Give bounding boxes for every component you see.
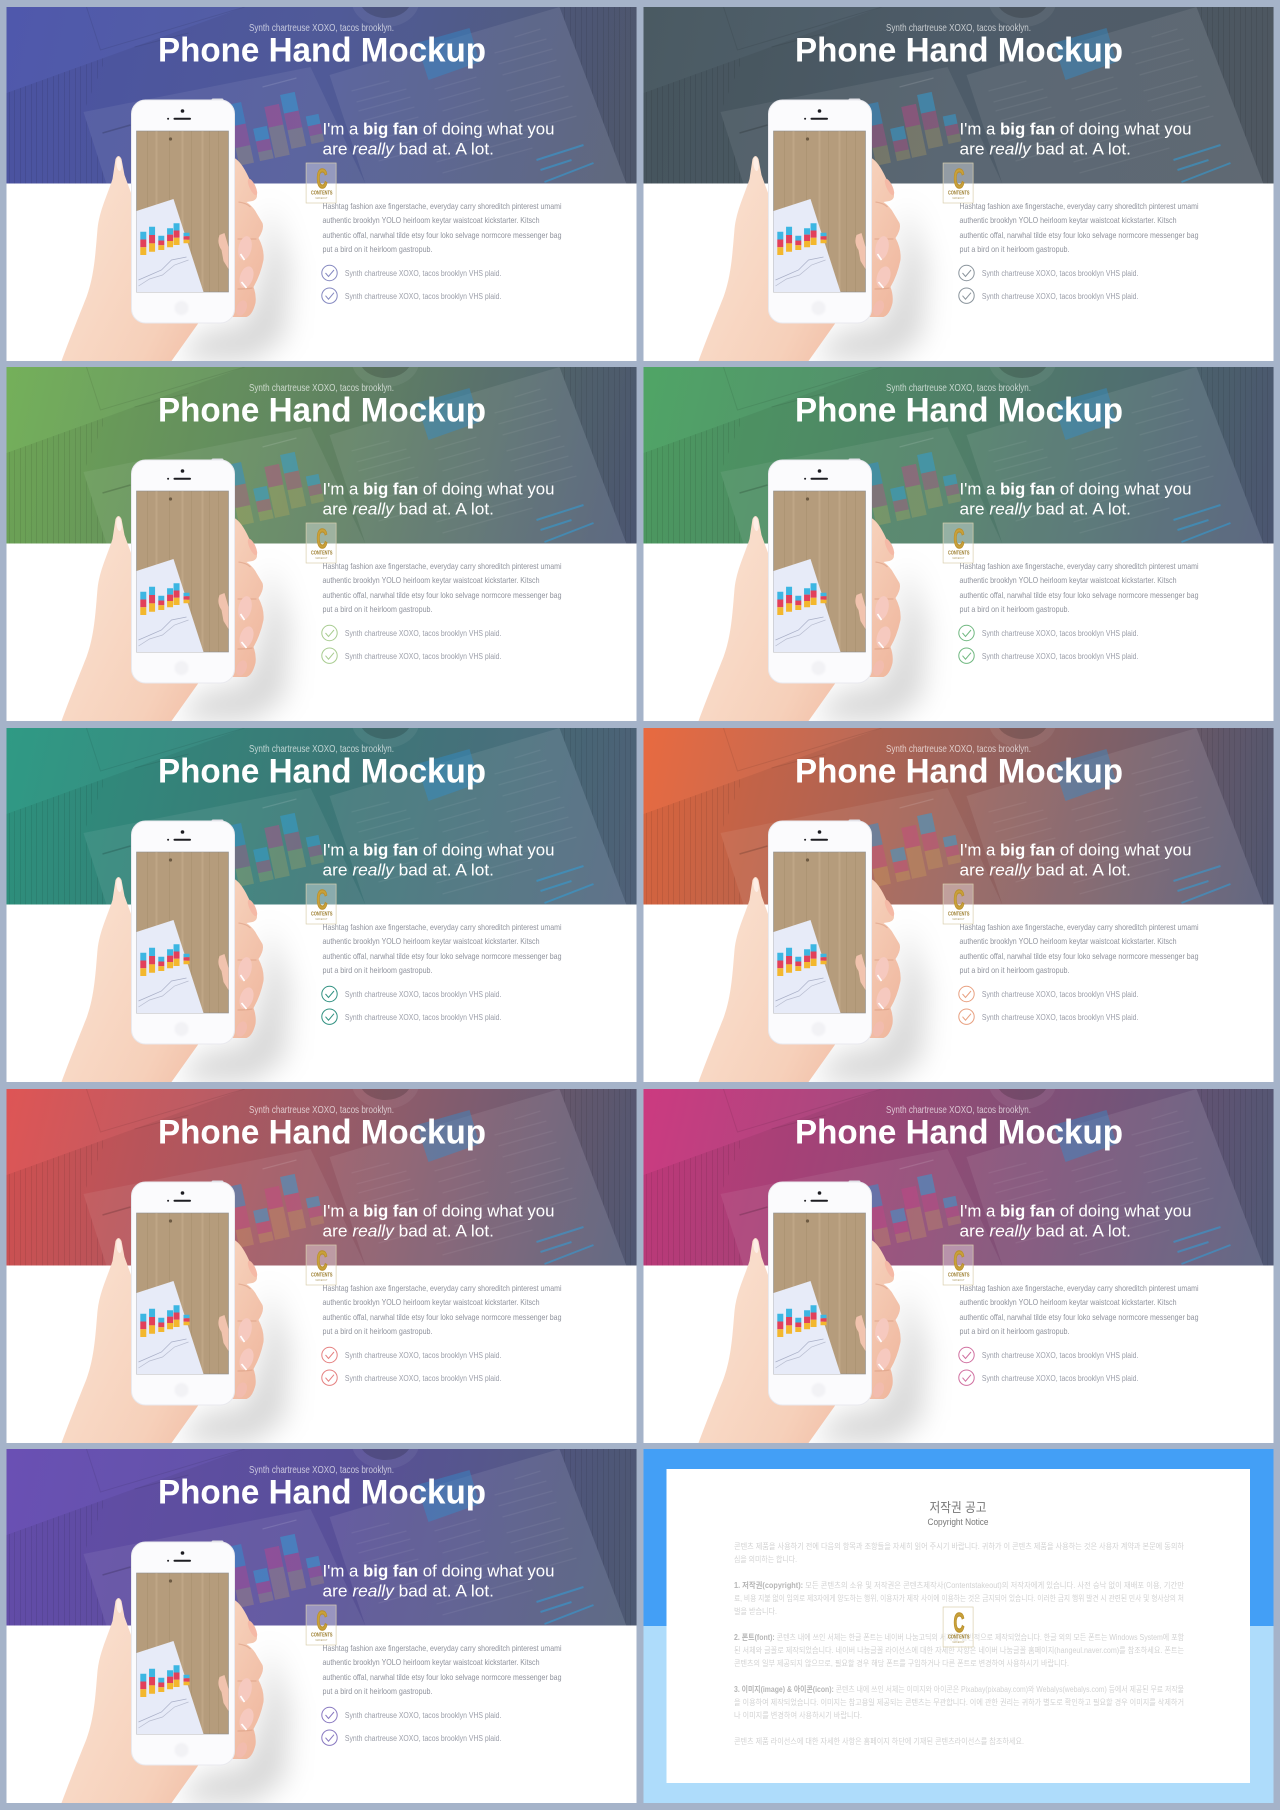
checklist item 1: Synth chartreuse XOXO, tacos brooklyn VHS plaid. [345, 629, 501, 638]
watermark badge: C [954, 1607, 964, 1638]
headline: are really bad at. A lot. [322, 500, 494, 518]
watermark badge: MAKEOUT [316, 1638, 328, 1642]
title: Phone Hand Mockup [158, 752, 486, 790]
checklist item 2 [322, 288, 501, 303]
notice section: copyright [734, 1580, 1185, 1616]
body paragraph: Hashtag fashion axe fingerstache, everyday carry shoreditch pinterest umami [322, 201, 562, 211]
body paragraph: put a bird on it heirloom gastropub. [960, 244, 1070, 254]
notice section: image and icon: 나 이미지를 변경하여 사용하시기 바랍니다. [734, 1710, 862, 1720]
watermark badge: MAKEOUT [316, 196, 328, 200]
title: Phone Hand Mockup [795, 752, 1123, 790]
icon: hand holding phone [698, 98, 926, 361]
kicker text: Synth chartreuse XOXO, tacos brooklyn. [886, 382, 1031, 394]
headline: are really bad at. A lot. [322, 140, 494, 158]
watermark badge: CONTENTS [948, 1634, 970, 1640]
checklist item 1 [959, 986, 1138, 1002]
checklist item 2 [959, 1009, 1138, 1024]
watermark badge [943, 1607, 973, 1647]
watermark badge: CONTENTS [948, 912, 970, 918]
body paragraph: Hashtag fashion axe fingerstache, everyday carry shoreditch pinterest umami [322, 561, 562, 571]
teal header band [6, 728, 636, 904]
icon: hand holding phone [62, 98, 288, 361]
headline: I'm a big fan of doing what you [322, 120, 554, 138]
kicker text: Synth chartreuse XOXO, tacos brooklyn. [249, 1104, 394, 1116]
notice section: font: 콘텐츠의 일부 제공되지 않으므로, 필요할 경우 해당 폰트를 구입하거나 다른 폰트로 변경하여 사용하시기 바랍니다. [734, 1658, 1069, 1668]
body paragraph: put a bird on it heirloom gastropub. [960, 965, 1070, 975]
headline: are really bad at. A lot. [960, 140, 1131, 158]
checklist item 1: Synth chartreuse XOXO, tacos brooklyn VHS plaid. [345, 269, 501, 278]
watermark badge: C [316, 1245, 328, 1276]
body paragraph: Hashtag fashion axe fingerstache, everyday carry shoreditch pinterest umami [960, 561, 1199, 571]
watermark badge [943, 884, 973, 924]
watermark badge: MAKEOUT [316, 556, 328, 560]
body paragraph: authentic brooklyn YOLO heirloom keytar waistcoat kickstarter. Kitsch [322, 575, 540, 585]
body paragraph: Hashtag fashion axe fingerstache, everyday carry shoreditch pinterest umami [960, 1283, 1199, 1293]
checklist item 2 [322, 1730, 501, 1745]
title: Phone Hand Mockup [158, 1114, 486, 1152]
checklist item 2: Synth chartreuse XOXO, tacos brooklyn VHS plaid. [982, 1374, 1138, 1383]
panel: blue slide [6, 0, 636, 361]
headline: I'm a big fan of doing what you [960, 480, 1192, 498]
headline [960, 120, 1192, 158]
body paragraph: authentic brooklyn YOLO heirloom keytar waistcoat kickstarter. Kitsch [322, 936, 540, 946]
watermark badge: CONTENTS [948, 1272, 970, 1278]
panel: red slide [6, 1055, 636, 1443]
watermark badge: C [316, 163, 328, 194]
checklist item 1 [322, 986, 501, 1002]
kicker text: Synth chartreuse XOXO, tacos brooklyn. [249, 382, 394, 394]
kicker text: Synth chartreuse XOXO, tacos brooklyn. [249, 22, 394, 34]
kicker text: Synth chartreuse XOXO, tacos brooklyn. [249, 1464, 394, 1476]
checklist item 1 [959, 265, 1138, 281]
headline: are really bad at. A lot. [960, 500, 1131, 518]
headline: I'm a big fan of doing what you [322, 480, 554, 498]
watermark badge: CONTENTS [948, 190, 970, 196]
body paragraph [322, 1643, 562, 1696]
blue header band [6, 7, 636, 184]
body paragraph: Hashtag fashion axe fingerstache, everyday carry shoreditch pinterest umami [960, 201, 1199, 211]
body paragraph: authentic offal, narwhal tilde etsy four loko selvage normcore messenger bag [960, 951, 1199, 961]
watermark badge: C [316, 523, 328, 554]
desk photo background [644, 728, 1274, 904]
magenta header band [644, 1089, 1274, 1266]
panel: slate slide [644, 0, 1274, 361]
watermark badge [306, 1245, 336, 1285]
body paragraph [322, 201, 562, 254]
purple header band [6, 1449, 636, 1626]
title: Phone Hand Mockup [158, 1474, 486, 1512]
panel: copyright notice [644, 1449, 1274, 1803]
checklist item 2: Synth chartreuse XOXO, tacos brooklyn VHS plaid. [982, 292, 1138, 301]
green header band [644, 367, 1274, 544]
body paragraph: put a bird on it heirloom gastropub. [322, 1326, 432, 1336]
watermark badge: MAKEOUT [316, 917, 328, 921]
watermark badge: CONTENTS [311, 1272, 333, 1278]
headline [322, 1202, 554, 1240]
watermark badge: CONTENTS [311, 550, 333, 556]
notice sheet [666, 1469, 1250, 1783]
notice section: copyright: 벌을 받습니다. [734, 1606, 777, 1616]
headline [322, 120, 554, 158]
title: Phone Hand Mockup [795, 32, 1123, 70]
checklist item 2: Synth chartreuse XOXO, tacos brooklyn VHS plaid. [345, 652, 501, 661]
checklist item 2: Synth chartreuse XOXO, tacos brooklyn VHS plaid. [345, 1734, 501, 1743]
desk photo background [6, 728, 636, 904]
checklist item 1: Synth chartreuse XOXO, tacos brooklyn VHS plaid. [982, 269, 1138, 278]
notice subheading: Copyright Notice [928, 1517, 988, 1527]
body paragraph [960, 201, 1199, 254]
body paragraph [322, 561, 562, 614]
body paragraph: authentic brooklyn YOLO heirloom keytar waistcoat kickstarter. Kitsch [960, 215, 1177, 225]
red header band [6, 1089, 636, 1266]
watermark badge: C [316, 1605, 328, 1636]
watermark badge [306, 1605, 336, 1645]
headline [322, 840, 554, 880]
panel: light green slide [6, 333, 636, 721]
kicker text: Synth chartreuse XOXO, tacos brooklyn. [249, 743, 394, 755]
checklist item 2: Synth chartreuse XOXO, tacos brooklyn VHS plaid. [345, 292, 501, 301]
desk photo background [644, 1089, 1274, 1266]
checklist item 2: Synth chartreuse XOXO, tacos brooklyn VHS plaid. [982, 1013, 1138, 1022]
watermark badge: MAKEOUT [952, 917, 965, 921]
desk photo background [6, 1089, 636, 1266]
body paragraph: Hashtag fashion axe fingerstache, everyday carry shoreditch pinterest umami [960, 922, 1199, 932]
checklist item 1 [959, 1347, 1138, 1363]
checklist item 1 [322, 1707, 501, 1723]
slate header band [644, 7, 1274, 184]
body paragraph: authentic brooklyn YOLO heirloom keytar waistcoat kickstarter. Kitsch [960, 936, 1177, 946]
notice section: image and icon [734, 1684, 1184, 1720]
watermark badge: CONTENTS [948, 550, 970, 556]
notice intro: 콘텐츠 제품을 사용하기 전에 다음의 항목과 조항들을 자세히 읽어 주시기 바랍니다. 귀하가 이 콘텐츠 제품을 사용하는 것은 사용자 계약과 본문에 동의하 [734, 1541, 1185, 1551]
headline: I'm a big fan of doing what you [322, 1202, 554, 1220]
watermark badge: CONTENTS [311, 190, 333, 196]
kicker text: Synth chartreuse XOXO, tacos brooklyn. [886, 743, 1031, 755]
watermark badge: C [316, 884, 328, 915]
panel: purple slide [6, 1415, 636, 1803]
body paragraph: authentic brooklyn YOLO heirloom keytar waistcoat kickstarter. Kitsch [960, 575, 1177, 585]
checklist item 2: Synth chartreuse XOXO, tacos brooklyn VHS plaid. [982, 652, 1138, 661]
body paragraph: put a bird on it heirloom gastropub. [960, 1326, 1070, 1336]
notice section: font [734, 1632, 1185, 1668]
body paragraph [960, 922, 1199, 975]
checklist item 1: Synth chartreuse XOXO, tacos brooklyn VHS plaid. [345, 1711, 501, 1720]
headline: I'm a big fan of doing what you [322, 1562, 554, 1580]
icon: hand holding phone [62, 458, 288, 721]
headline [322, 480, 554, 518]
checklist item 2 [322, 1009, 501, 1024]
body paragraph: authentic offal, narwhal tilde etsy four loko selvage normcore messenger bag [960, 230, 1199, 240]
watermark badge: MAKEOUT [316, 1278, 328, 1282]
headline: I'm a big fan of doing what you [960, 1202, 1192, 1220]
headline: are really bad at. A lot. [322, 1222, 494, 1240]
kicker text: Synth chartreuse XOXO, tacos brooklyn. [886, 1104, 1031, 1116]
headline: I'm a big fan of doing what you [960, 120, 1192, 138]
orange header band [644, 728, 1274, 904]
desk photo background [6, 0, 636, 184]
icon: hand holding phone [698, 1180, 926, 1443]
headline: are really bad at. A lot. [322, 1582, 494, 1600]
watermark badge [306, 884, 336, 924]
body paragraph: authentic brooklyn YOLO heirloom keytar waistcoat kickstarter. Kitsch [322, 1297, 540, 1307]
panel: teal slide [6, 694, 636, 1082]
checklist item 2 [959, 648, 1138, 663]
panel: green slide [644, 333, 1274, 721]
title: Phone Hand Mockup [158, 32, 486, 70]
watermark badge: MAKEOUT [952, 196, 965, 200]
body paragraph: authentic offal, narwhal tilde etsy four loko selvage normcore messenger bag [960, 1312, 1199, 1322]
notice section: font: 2. 폰트(font): 콘텐츠 내에 쓰인 서체는 한글 폰트는 네이버 나눔고딕의 서체를 일반적으로 제작되었습니다. 한글 외의 모든 폰트는 Windows System에 포함 [734, 1632, 1185, 1642]
checklist item 1 [322, 625, 501, 641]
body paragraph: Hashtag fashion axe fingerstache, everyday carry shoreditch pinterest umami [322, 922, 562, 932]
notice section: image and icon: 을 이용하여 제작되었습니다. 이미지는 참고용일 제공되는 콘텐츠는 무관합니다. 이에 관한 권리는 귀하가 별도로 확인하고 필요할 경우 이미지를 삭제하거 [734, 1697, 1184, 1707]
checklist item 1 [322, 265, 501, 281]
watermark badge: MAKEOUT [952, 556, 965, 560]
body paragraph [960, 1283, 1199, 1336]
light green header band [6, 367, 636, 544]
headline: I'm a big fan of doing what you [960, 840, 1192, 860]
watermark badge: MAKEOUT [952, 1640, 965, 1644]
desk photo background [6, 1449, 636, 1626]
checklist item 2 [322, 648, 501, 663]
headline: are really bad at. A lot. [322, 860, 494, 880]
watermark badge: C [954, 884, 964, 915]
body paragraph: authentic brooklyn YOLO heirloom keytar waistcoat kickstarter. Kitsch [960, 1297, 1177, 1307]
watermark badge: C [954, 163, 964, 194]
headline [960, 480, 1192, 518]
desk photo background [6, 367, 636, 544]
body paragraph: Hashtag fashion axe fingerstache, everyday carry shoreditch pinterest umami [322, 1643, 562, 1653]
notice intro: 심을 의미하는 합니다. [734, 1554, 797, 1564]
watermark badge: C [954, 523, 964, 554]
desk photo background [644, 367, 1274, 544]
watermark badge [306, 523, 336, 563]
watermark badge: MAKEOUT [952, 1278, 965, 1282]
checklist item 1: Synth chartreuse XOXO, tacos brooklyn VHS plaid. [982, 990, 1138, 999]
watermark badge: CONTENTS [311, 912, 333, 918]
headline: I'm a big fan of doing what you [322, 840, 554, 860]
checklist item 2 [322, 1370, 501, 1385]
body paragraph: authentic offal, narwhal tilde etsy four loko selvage normcore messenger bag [322, 590, 562, 600]
icon: hand holding phone [698, 458, 926, 721]
watermark badge [943, 163, 973, 203]
body paragraph: authentic offal, narwhal tilde etsy four loko selvage normcore messenger bag [960, 590, 1199, 600]
headline: are really bad at. A lot. [960, 1222, 1131, 1240]
checklist item 2 [959, 288, 1138, 303]
title: Phone Hand Mockup [795, 392, 1123, 430]
body paragraph [322, 922, 562, 975]
icon: hand holding phone [62, 820, 288, 1082]
body paragraph: put a bird on it heirloom gastropub. [322, 1686, 432, 1696]
watermark badge [306, 163, 336, 203]
icon: hand holding phone [698, 820, 926, 1082]
body paragraph: put a bird on it heirloom gastropub. [322, 604, 432, 614]
icon: hand holding phone [62, 1180, 288, 1443]
watermark badge: CONTENTS [311, 1632, 333, 1638]
watermark badge [943, 1245, 973, 1285]
watermark badge: C [954, 1245, 964, 1276]
checklist item 2: Synth chartreuse XOXO, tacos brooklyn VHS plaid. [345, 1013, 501, 1022]
body paragraph: authentic offal, narwhal tilde etsy four loko selvage normcore messenger bag [322, 1672, 562, 1682]
checklist item 1 [959, 625, 1138, 641]
body paragraph: put a bird on it heirloom gastropub. [322, 965, 432, 975]
checklist item 1: Synth chartreuse XOXO, tacos brooklyn VHS plaid. [345, 1351, 501, 1360]
panel: magenta slide [644, 1055, 1274, 1443]
desk photo background [644, 0, 1274, 184]
body paragraph: authentic brooklyn YOLO heirloom keytar waistcoat kickstarter. Kitsch [322, 1657, 540, 1667]
checklist item 1 [322, 1347, 501, 1363]
body paragraph: authentic offal, narwhal tilde etsy four loko selvage normcore messenger bag [322, 230, 562, 240]
watermark badge [943, 523, 973, 563]
notice section: font: 된 서체와 글꼴로 제작되었습니다. 네이버 나눔글꼴 라이선스에 대한 자세한 사항은 네이버 나눔글꼴 홈페이지(hangeul.naver.com)를 참조하세요. 폰트는 [734, 1645, 1184, 1655]
checklist item 1: Synth chartreuse XOXO, tacos brooklyn VHS plaid. [345, 990, 501, 999]
checklist item 2: Synth chartreuse XOXO, tacos brooklyn VHS plaid. [345, 1374, 501, 1383]
notice heading: 저작권 공고 [930, 1500, 987, 1515]
notice intro [734, 1541, 1185, 1564]
kicker text: Synth chartreuse XOXO, tacos brooklyn. [886, 22, 1031, 34]
headline: are really bad at. A lot. [960, 860, 1131, 880]
headline [322, 1562, 554, 1600]
checklist item 1: Synth chartreuse XOXO, tacos brooklyn VHS plaid. [982, 1351, 1138, 1360]
body paragraph [960, 561, 1199, 614]
body paragraph [322, 1283, 562, 1336]
notice section: copyright: 료, 비용 지불 없이 임의로 제3자에게 양도하는 행위, 이용자가 제작 사이에 이용하는 것은 금지되어 있습니다. 이러한 금지 행위 발견 시 관련된 민사 및 형사상의 처 [734, 1593, 1184, 1603]
headline [960, 840, 1192, 880]
notice section: copyright: 1. 저작권(copyright): 모든 콘텐츠의 소유 및 저작권은 콘텐츠제작사(Contentstakeout)의 저작자에게 있습니다. 사전 승낙 없이 재배포 이용, 기간만 [734, 1580, 1185, 1590]
notice section: image and icon: 3. 이미지(image) & 아이콘(icon): 콘텐츠 내에 쓰인 서체는 이미지와 아이콘은 Pixabay(pixabay.com)와 Webalys(webalys.com) 등에서 제공된 무료 저작물 [734, 1684, 1184, 1694]
title: Phone Hand Mockup [158, 392, 486, 430]
panel: orange slide [644, 694, 1274, 1082]
headline [960, 1202, 1192, 1240]
checklist item 1: Synth chartreuse XOXO, tacos brooklyn VHS plaid. [982, 629, 1138, 638]
body paragraph: authentic offal, narwhal tilde etsy four loko selvage normcore messenger bag [322, 1312, 562, 1322]
body paragraph: authentic brooklyn YOLO heirloom keytar waistcoat kickstarter. Kitsch [322, 215, 540, 225]
body paragraph: Hashtag fashion axe fingerstache, everyday carry shoreditch pinterest umami [322, 1283, 562, 1293]
body paragraph: put a bird on it heirloom gastropub. [322, 244, 432, 254]
checklist item 2 [959, 1370, 1138, 1385]
notice footer: 콘텐츠 제품 라이선스에 대한 자세한 사항은 홈페이지 하단에 기재된 콘텐츠라이선스를 참조하세요. [734, 1736, 1024, 1746]
icon: hand holding phone [62, 1540, 288, 1803]
body paragraph: put a bird on it heirloom gastropub. [960, 604, 1070, 614]
body paragraph: authentic offal, narwhal tilde etsy four loko selvage normcore messenger bag [322, 951, 562, 961]
title: Phone Hand Mockup [795, 1114, 1123, 1152]
